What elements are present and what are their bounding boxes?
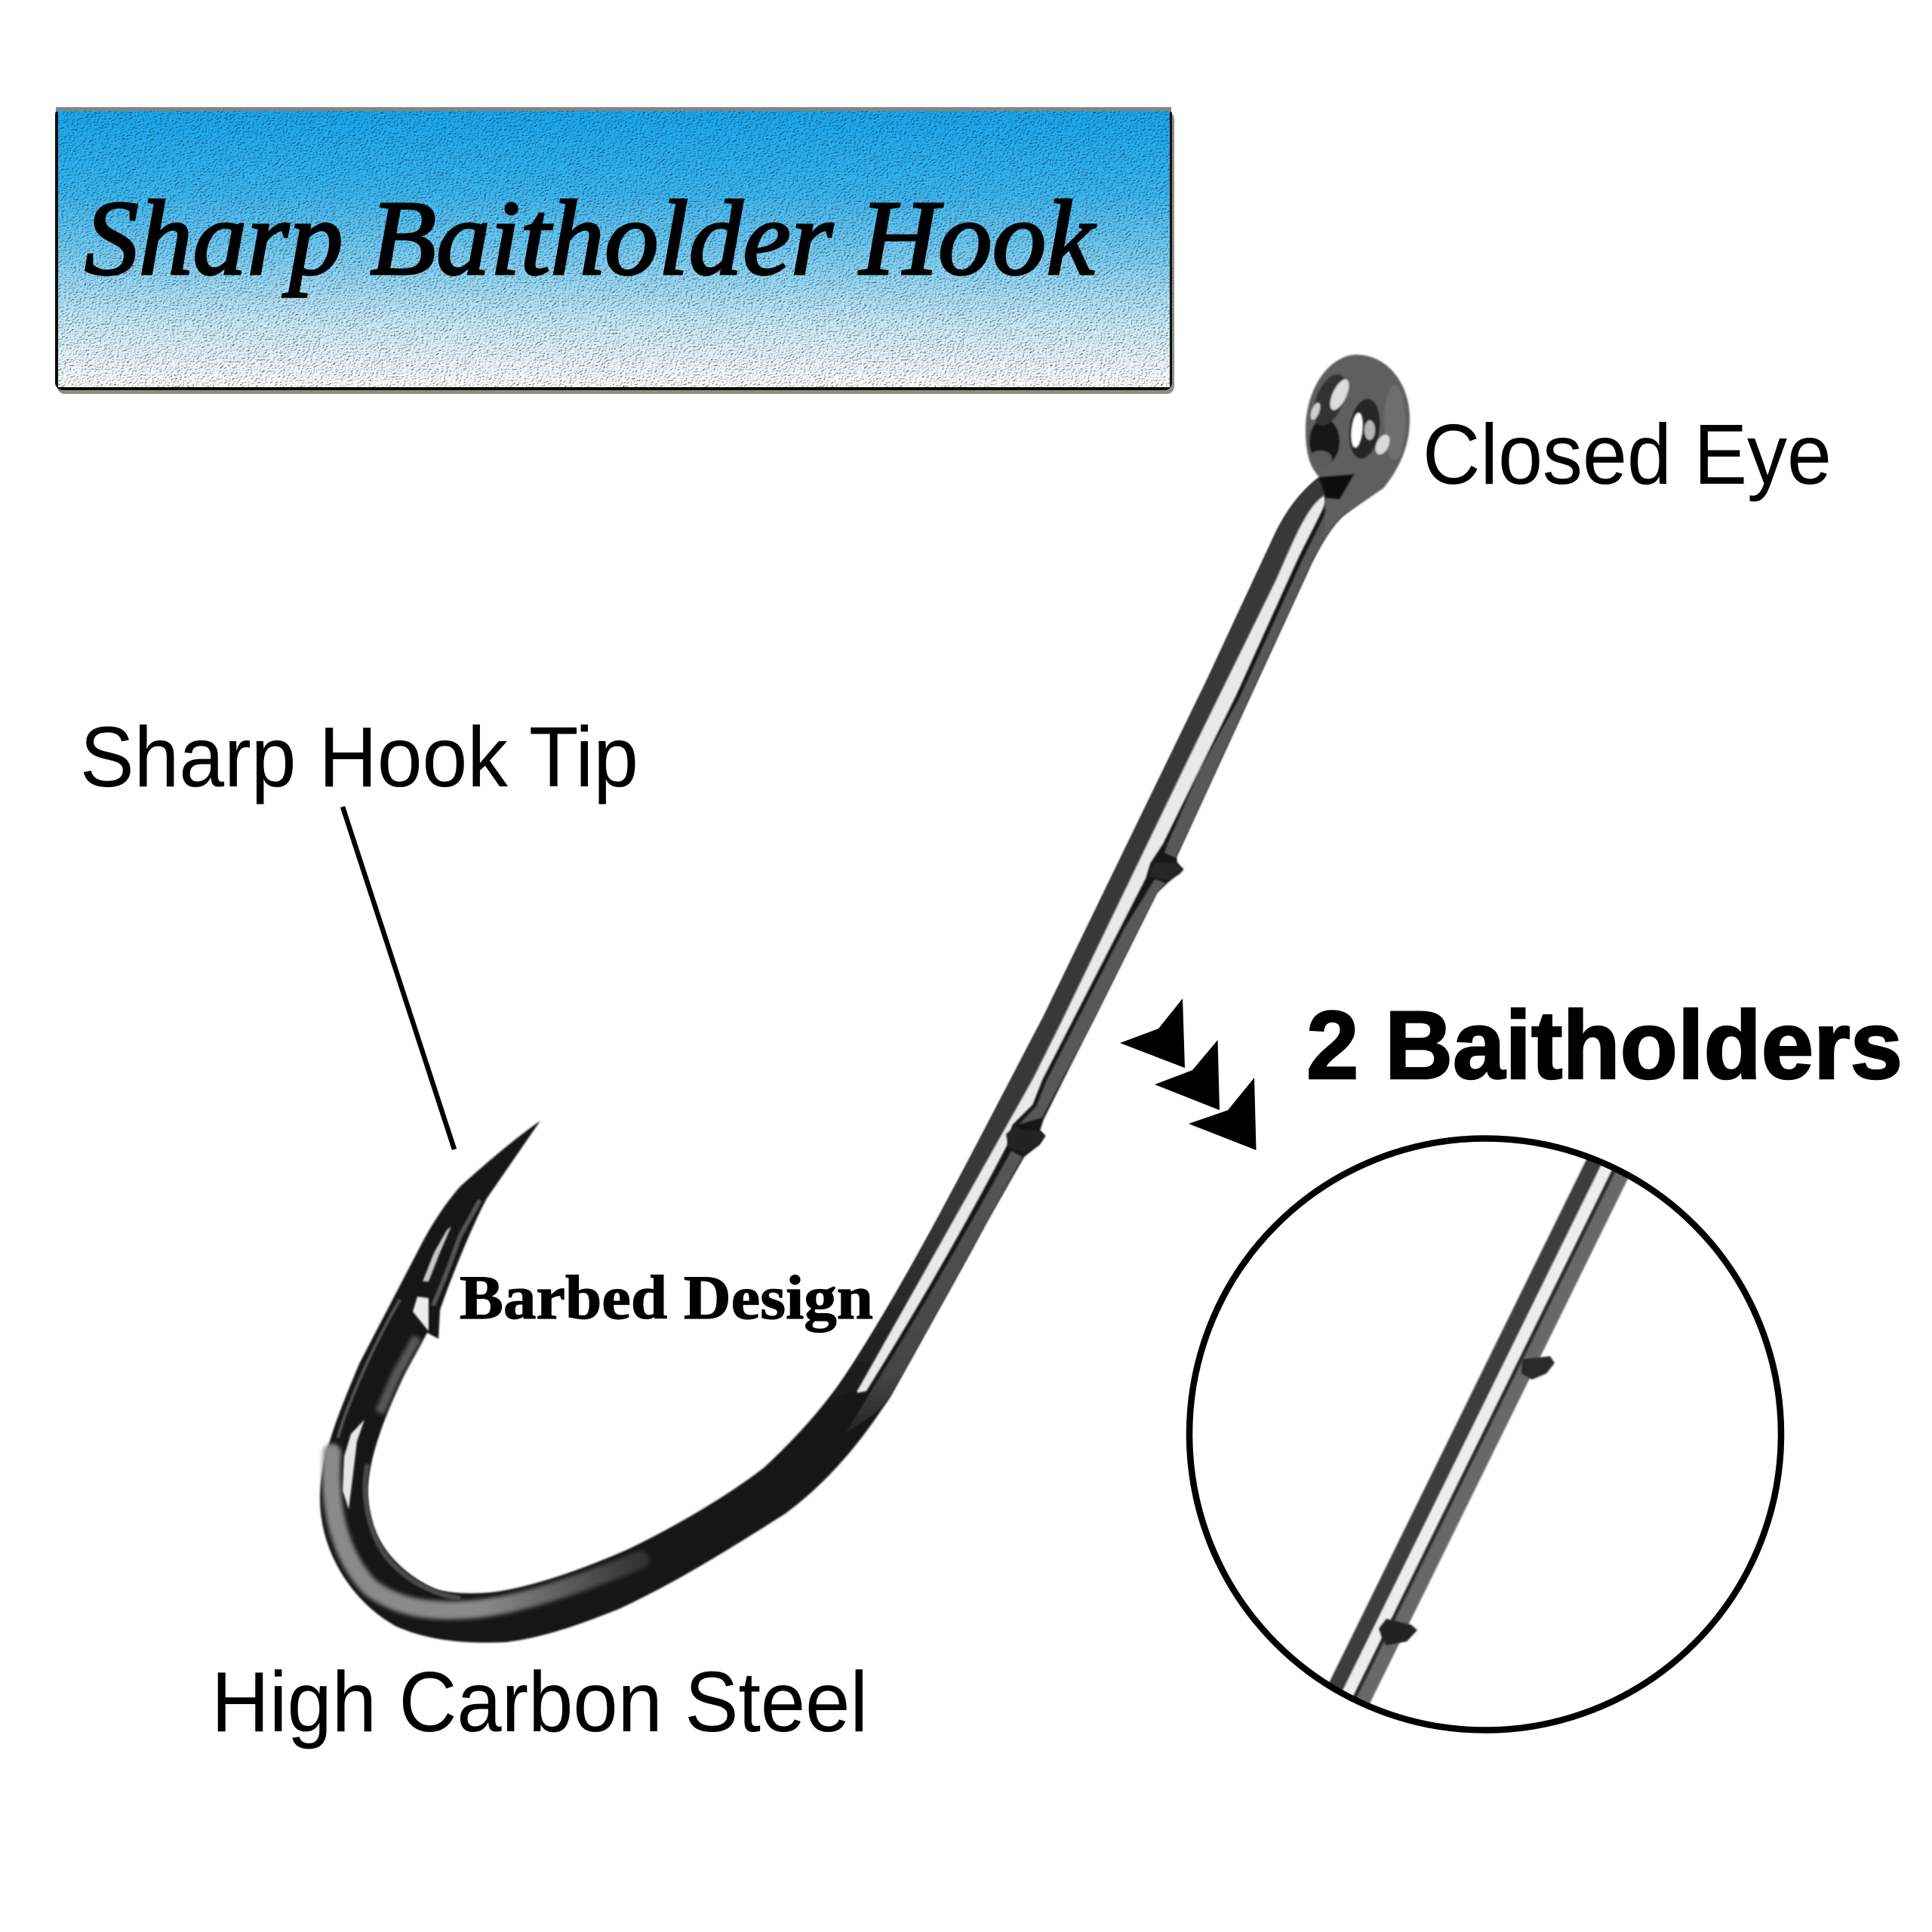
shaft right band middle: [1019, 879, 1166, 1124]
barb notch highlight: [413, 1297, 429, 1331]
detail circle: baitholder close-up: [1189, 1138, 1781, 1730]
arrow 2: [1155, 1040, 1220, 1110]
arrows pointing to detail circle: [1120, 998, 1256, 1150]
title banner: [55, 107, 1174, 394]
label: sharp hook tip: Sharp Hook Tip: [80, 709, 638, 804]
label: high carbon steel: High Carbon Steel: [211, 1654, 868, 1749]
hook silhouette: [320, 468, 1366, 1643]
bend inner rim: [365, 1464, 460, 1598]
pointer line to hook tip: [343, 807, 454, 1149]
close-up right band: [1352, 1154, 1631, 1720]
point highlight: [423, 1226, 451, 1281]
fishing hook illustration: [320, 355, 1410, 1643]
circle outline: [1189, 1138, 1781, 1730]
close-up white highlight: [1338, 1147, 1617, 1713]
label: closed eye: Closed Eye: [1423, 407, 1832, 502]
title text: Sharp Baitholder Hook: [85, 178, 1097, 297]
arrow 3: [1189, 1078, 1256, 1150]
point inner rim: [433, 1200, 480, 1306]
bend outer back line: [338, 1300, 400, 1438]
bend texture band: [331, 1453, 641, 1611]
close-up left band: [1338, 1147, 1617, 1713]
close-up lower barb: [1379, 1619, 1417, 1645]
shaft right band lower: [845, 1151, 1023, 1434]
shaft right band upper: [1164, 498, 1358, 858]
close-up upper barb: [1521, 1356, 1555, 1380]
bend highlight: [343, 1420, 365, 1509]
shaft white highlight: [858, 497, 1324, 1392]
close-up dark divider: [1354, 1171, 1616, 1697]
heading: 2 baitholders: 2 Baitholders: [1306, 992, 1903, 1100]
inner shaft grey below barb: [380, 1337, 417, 1413]
lower baitholder barb: [1006, 1126, 1045, 1153]
shaft left band: [830, 478, 1324, 1400]
arrow 1: [1120, 998, 1185, 1068]
close-up shaft: [1338, 1147, 1631, 1720]
closed eye: [1306, 355, 1410, 534]
label: barbed design: Barbed Design: [460, 1263, 873, 1332]
upper baitholder barb: [1149, 863, 1183, 881]
